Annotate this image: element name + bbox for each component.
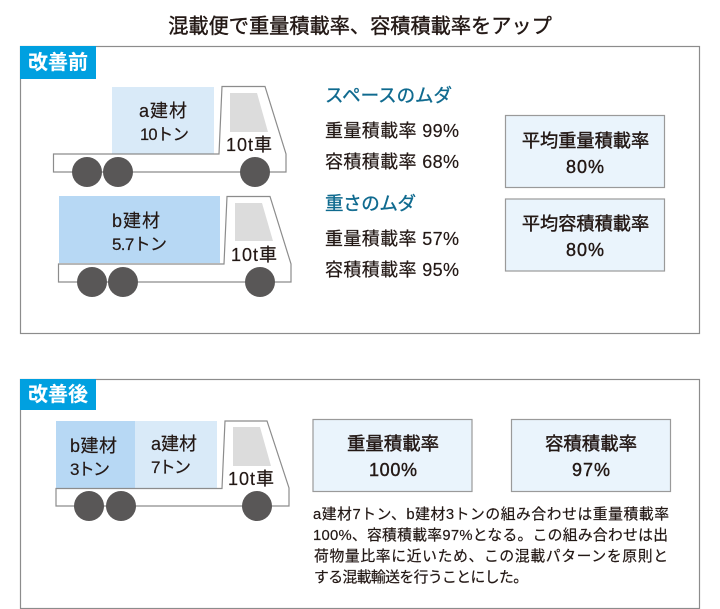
text block: space waste: スペースのムダ	[325, 85, 452, 106]
truck: a material: 10t車	[226, 135, 272, 155]
truck: b material: b建材	[112, 211, 160, 231]
text block: explanation: a建材7トン、b建材3トンの組み合わせは重量積載率	[313, 506, 669, 523]
truck: mixed load: 3トン	[70, 460, 110, 479]
box: weight load rate	[313, 420, 472, 492]
box: average weight load rate: 平均重量積載率	[522, 131, 649, 151]
title: 混載便で重量積載率、容積積載率をアップ	[168, 15, 552, 38]
text block: explanation: 荷物量比率に近いため、この混載パターンを原則と	[314, 548, 668, 565]
truck: b material: 10t車	[231, 245, 277, 265]
text block: space waste: 容積積載率 68%	[325, 152, 459, 172]
text block: explanation	[313, 506, 669, 586]
text block: explanation: する混載輸送を行うことにした。	[314, 569, 528, 586]
text block: weight waste: 重さのムダ	[325, 193, 416, 214]
box: average volume load rate	[506, 199, 664, 271]
tab: after	[20, 379, 96, 410]
text block: weight waste: 容積積載率 95%	[325, 260, 459, 280]
text block: space waste	[325, 85, 459, 172]
truck: b material	[58, 196, 291, 297]
tab: after: 改善後	[28, 383, 88, 406]
truck: mixed load: 7トン	[151, 458, 191, 477]
panel: before improvement	[20, 46, 700, 334]
text block: space waste: 重量積載率 99%	[325, 121, 459, 141]
truck: a material: 10トン	[140, 126, 189, 144]
box: weight load rate: 重量積載率	[347, 433, 439, 454]
truck: mixed load: 10t車	[228, 469, 274, 489]
truck: mixed load: a建材	[151, 434, 197, 454]
box: volume load rate	[512, 420, 670, 492]
box: average weight load rate: 80%	[566, 157, 604, 177]
truck: b material: 5.7トン	[112, 235, 167, 254]
truck: a material: a建材	[139, 101, 187, 121]
panel: after improvement	[20, 379, 700, 608]
box: weight load rate: 100%	[369, 460, 417, 480]
truck: mixed load: b建材	[70, 436, 117, 456]
text block: weight waste: 重量積載率 57%	[325, 229, 459, 249]
box: volume load rate: 容積積載率	[545, 433, 637, 454]
box: average weight load rate	[506, 116, 664, 188]
box: average volume load rate: 平均容積積載率	[522, 214, 649, 234]
text block: explanation: 100%、容積積載率97%となる。この組み合わせは出	[313, 527, 668, 544]
box: volume load rate: 97%	[572, 460, 610, 480]
box: average volume load rate: 80%	[566, 240, 604, 260]
tab: before	[20, 46, 96, 79]
text block: weight waste	[325, 193, 459, 280]
truck: a material	[54, 86, 286, 187]
truck: mixed load	[56, 421, 289, 521]
tab: before: 改善前	[28, 51, 88, 74]
